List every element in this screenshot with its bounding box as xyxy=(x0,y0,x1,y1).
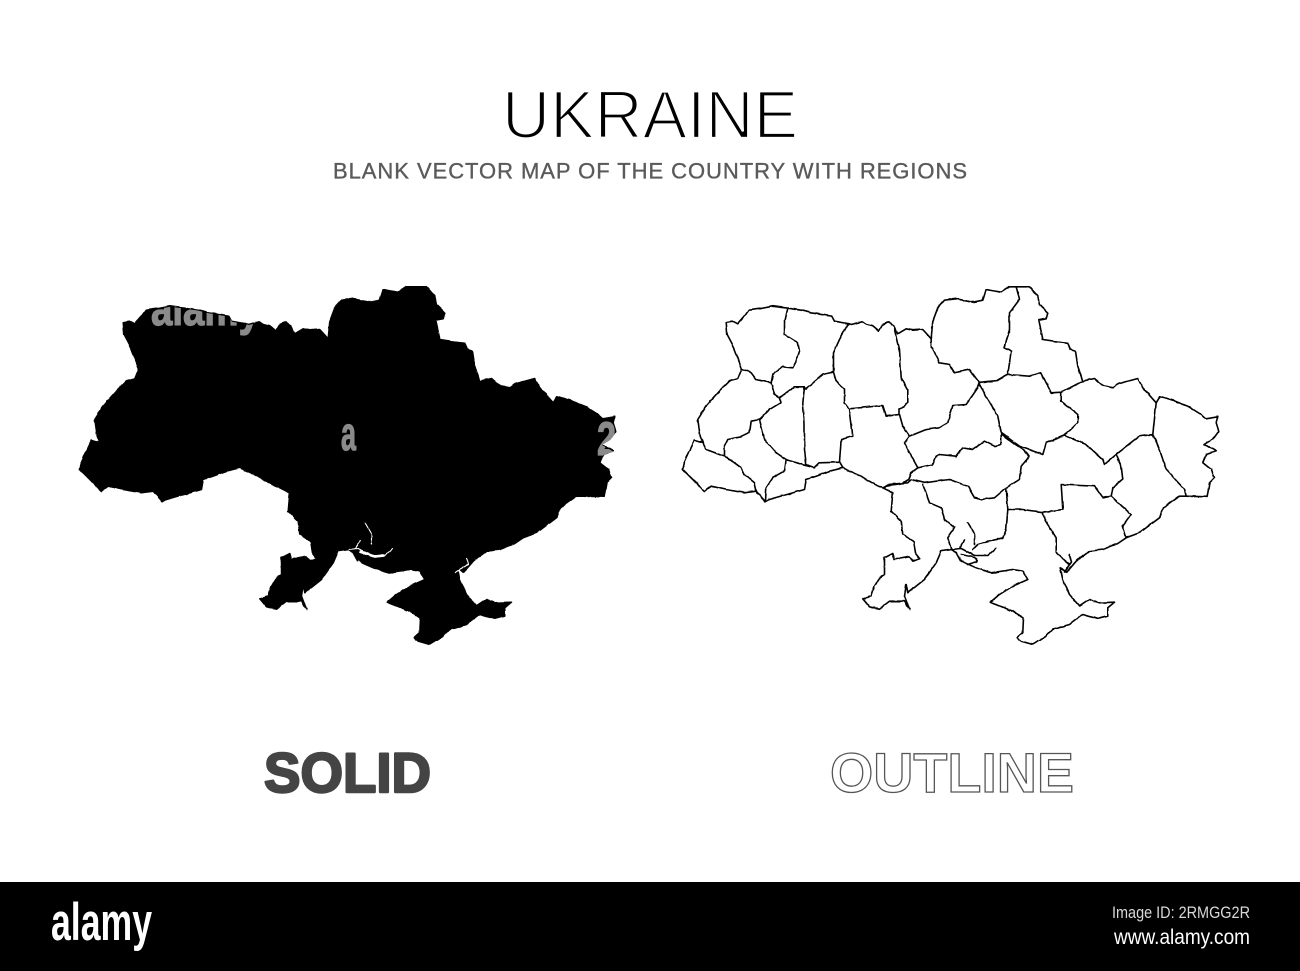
label: solid: SOLID xyxy=(264,741,431,804)
watermark fragments over solid map: a xyxy=(341,407,356,460)
solid silhouette of Ukraine xyxy=(80,287,616,645)
watermark fragments over solid map: alamy xyxy=(151,282,260,335)
label: outline: OUTLINE xyxy=(830,741,1074,804)
region borders xyxy=(703,287,1187,565)
website: www.alamy.com xyxy=(1113,926,1250,949)
solid map xyxy=(80,282,616,645)
watermark fragments over solid map: 2 xyxy=(597,412,616,465)
image id: Image ID: 2RMGG2R xyxy=(1112,903,1250,922)
dnipro estuary and spits xyxy=(952,541,1072,573)
footer logo: alamy xyxy=(51,893,152,952)
footer bar xyxy=(0,882,1300,971)
watermark fragments over solid map xyxy=(152,306,615,456)
country border xyxy=(683,287,1219,645)
title: UKRAINE xyxy=(502,77,798,153)
subtitle: BLANK VECTOR MAP OF THE COUNTRY WITH REGIONS xyxy=(333,158,967,184)
outline map with regions xyxy=(683,287,1219,645)
